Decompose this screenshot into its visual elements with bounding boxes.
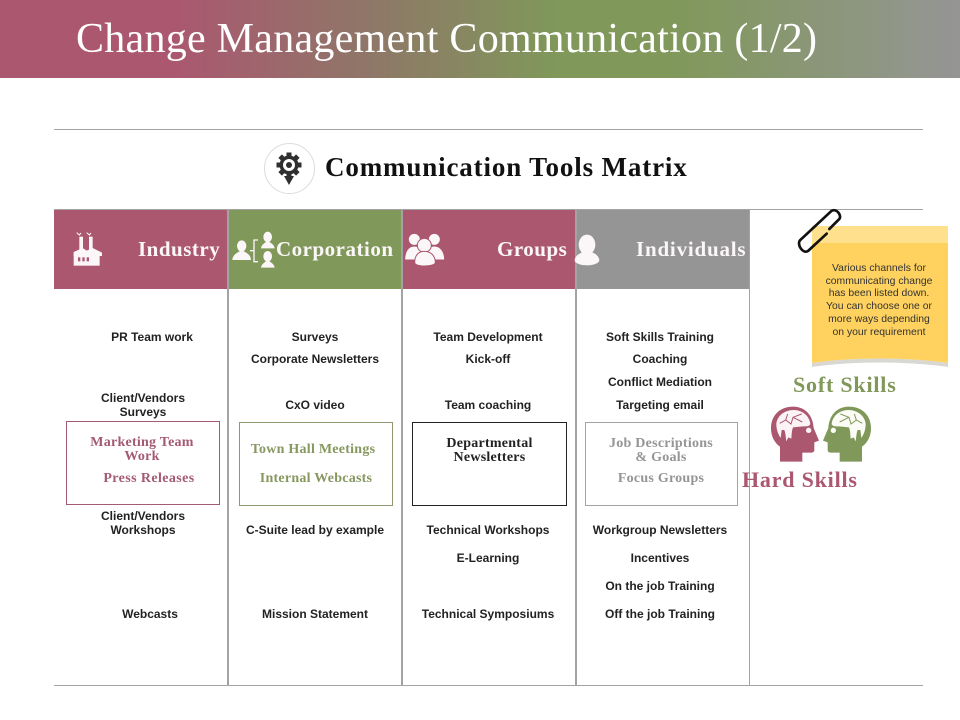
sticky note text: on your requirement xyxy=(832,327,926,338)
title: Change Management Communication (1/2) xyxy=(76,16,817,62)
column items: Groups xyxy=(422,330,554,621)
column items: Groups: E-Learning xyxy=(457,551,519,565)
column header: Groups xyxy=(402,210,576,289)
column items: Groups: Technical Symposiums xyxy=(422,607,554,621)
callout: Marketing box: Press Releases xyxy=(103,471,195,486)
icon: gear with arrow in circle xyxy=(264,143,315,194)
sticky note text xyxy=(826,263,932,338)
sticky note text: more ways depending xyxy=(828,314,930,325)
callout: Job Descriptions box xyxy=(585,422,738,506)
column items: Corporation: Corporate Newsletters xyxy=(251,352,379,366)
column items: Individuals: Soft Skills Training xyxy=(606,330,714,344)
column items: Individuals: Incentives xyxy=(631,551,689,565)
icon: pink head with brain xyxy=(771,406,819,462)
heading: Corporation: Corporation xyxy=(276,237,394,261)
column items: Groups: Technical Workshops xyxy=(427,523,549,537)
title banner xyxy=(0,0,960,78)
column items: Individuals xyxy=(592,330,727,621)
column header: Corporation xyxy=(228,210,402,289)
callout: Job Descriptions box: & Goals xyxy=(635,450,687,464)
label: Hard Skills: Hard Skills xyxy=(742,467,858,492)
column items: Corporation xyxy=(246,330,384,621)
callout: Marketing box xyxy=(66,421,220,505)
column items: Corporation: Mission Statement xyxy=(262,607,368,621)
callout: Town Hall box xyxy=(239,422,393,506)
sticky note text: has been listed down. xyxy=(829,288,929,299)
callout: Marketing box: Marketing Team xyxy=(90,435,194,450)
icon: person xyxy=(574,234,600,266)
column items: Individuals: Targeting email xyxy=(616,398,704,412)
column items: Groups: Team Development xyxy=(433,330,543,344)
sticky note text: Various channels for xyxy=(832,263,926,274)
callout: Town Hall box: Town Hall Meetings xyxy=(251,442,375,457)
column items: Individuals: Workgroup Newsletters xyxy=(593,523,727,537)
matrix heading: Communication Tools Matrix xyxy=(325,152,688,182)
icon: group of people xyxy=(405,234,444,266)
callout: Departmental box: Departmental xyxy=(446,436,533,450)
callout: Departmental box xyxy=(412,422,567,506)
column header: Industry xyxy=(54,210,228,289)
icon: paperclip xyxy=(798,208,842,253)
column items: Groups: Kick-off xyxy=(466,352,510,366)
column items: Industry: Webcasts xyxy=(122,607,178,621)
column items: Corporation: Surveys xyxy=(292,330,338,344)
callout: Departmental box: Newsletters xyxy=(454,450,525,464)
column items: Groups: Team coaching xyxy=(445,398,531,412)
column items: Industry: Client/Vendors xyxy=(101,509,185,523)
heading: Groups: Groups xyxy=(497,237,567,261)
icon: factory xyxy=(74,232,102,266)
heading: Industry: Industry xyxy=(138,237,220,261)
column items: Industry: Workshops xyxy=(110,523,176,537)
column items: Industry xyxy=(101,330,193,621)
icon: green head with brain xyxy=(823,406,871,462)
sticky note text: You can choose one or xyxy=(826,301,932,312)
column items: Individuals: Coaching xyxy=(633,352,687,366)
column items: Industry: Surveys xyxy=(120,405,166,419)
icon: people hierarchy xyxy=(232,232,275,268)
sticky note text: communicating change xyxy=(826,276,932,287)
callout: Marketing box: Work xyxy=(124,449,160,464)
column items: Industry: PR Team work xyxy=(111,330,193,344)
column items: Corporation: C-Suite lead by example xyxy=(246,523,384,537)
column items: Individuals: Conflict Mediation xyxy=(608,375,712,389)
callout: Job Descriptions box: Focus Groups xyxy=(618,471,704,486)
column items: Corporation: CxO video xyxy=(285,398,345,412)
heading: Individuals: Individuals xyxy=(636,237,746,261)
column items: Industry: Client/Vendors xyxy=(101,391,185,405)
column header: Individuals xyxy=(576,210,749,289)
sticky note xyxy=(812,226,948,367)
column items: Individuals: Off the job Training xyxy=(605,607,715,621)
label: Soft Skills: Soft Skills xyxy=(793,372,897,397)
callout: Job Descriptions box: Job Descriptions xyxy=(609,436,713,450)
column items: Individuals: On the job Training xyxy=(605,579,715,593)
callout: Town Hall box: Internal Webcasts xyxy=(260,471,372,486)
